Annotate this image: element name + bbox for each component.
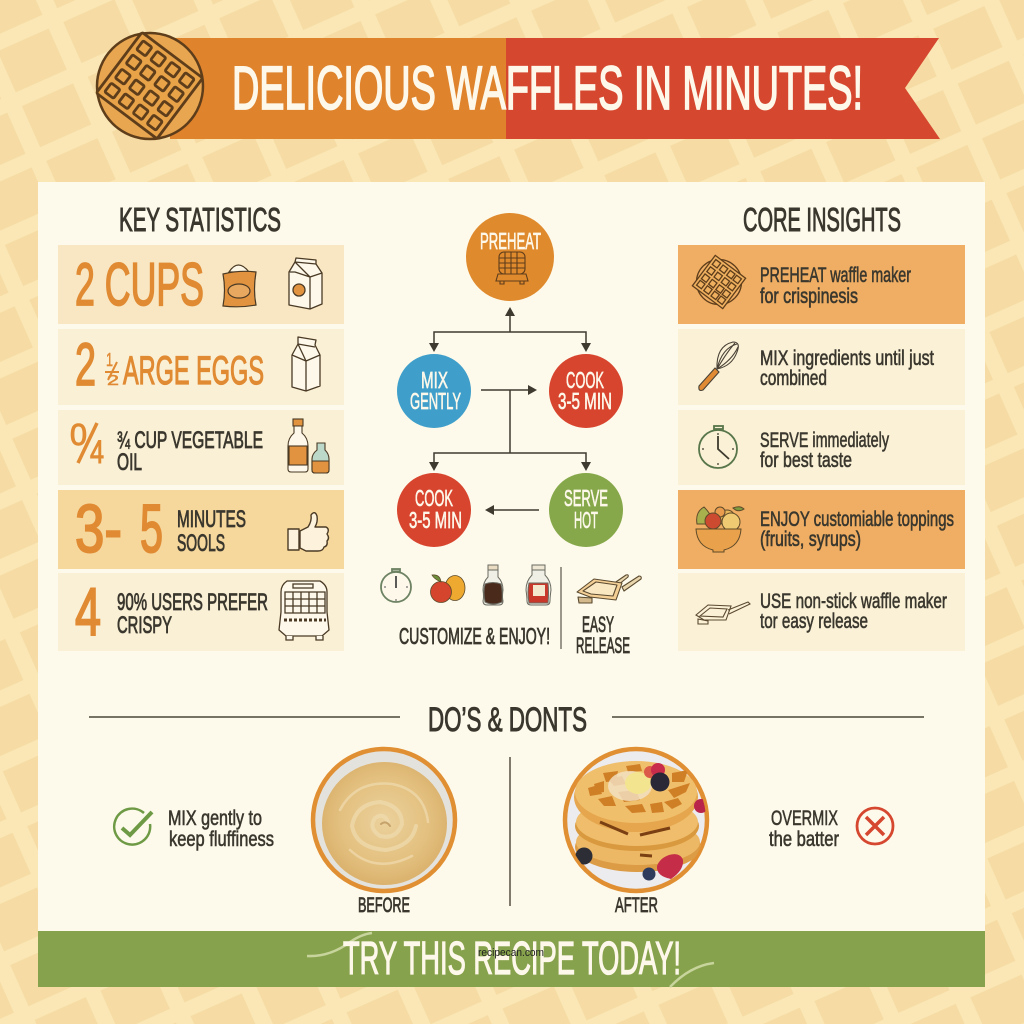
divider [509,757,511,906]
heading: core insights: CORE INSIGHTS [743,201,901,238]
icon: oil bottles [288,419,329,473]
icon: whisk [699,342,738,390]
stat row: 2 cups: 2 CUPS [75,251,204,318]
stat row: users prefer crispy [58,573,344,651]
insight: enjoy: (fruits, syrups) [760,528,861,551]
divider [560,567,562,649]
stat row: large eggs: 1 [106,350,113,370]
panel: flowchart [381,213,641,658]
do: mix gently [114,807,274,851]
icon: waffle logo [96,32,203,139]
banner orange section [170,38,506,139]
do: mix gently: keep fluffiness [169,828,274,851]
heading: key statistics: KEY STATISTICS [119,201,281,238]
stat row: large eggs [58,329,344,405]
stat row: large eggs: 2 [107,372,119,389]
don't: overmix: OVERMIX [771,807,838,830]
step: serve hot: SERVE [564,485,608,511]
step: cook again [397,473,471,547]
don't: overmix: the batter [769,828,839,851]
insight: preheat [678,245,965,324]
icon: waffle iron [496,252,528,284]
call to action: TRY THIS RECIPE TODAY! [343,932,681,984]
label: easy release: RELEASE [576,633,630,658]
stat row: vegetable oil [58,410,344,485]
step: preheat: PREHEAT [480,228,541,254]
panel: do's and don'ts [89,701,924,917]
icon: milk carton [289,258,322,309]
icon: non-stick pan [577,575,641,603]
icon: jam jar [526,565,551,605]
stat row: minutes: MINUTES [177,506,246,533]
label: easy release: EASY [582,612,614,637]
icon: clock [699,426,737,468]
insight: non-stick: tor easy release [760,610,868,633]
icon: flour bag [223,265,256,307]
step: cook: COOK [566,367,604,393]
stat row: 2 cups [58,245,344,324]
icon: thumbs up [288,513,328,551]
banner red section [506,38,940,139]
icon: egg carton [292,337,320,391]
icon: check [114,809,152,845]
stat row: vegetable oil: ¾ CUP VEGETABLE [117,427,263,454]
insight: preheat: for crispinesis [760,285,858,308]
icon: pan [696,602,750,624]
insight: mix [678,329,965,405]
footer banner [38,931,985,987]
insight: non-stick [678,573,965,651]
step: mix gently: GENTLY [410,388,461,414]
label: after: AFTER [615,894,658,917]
step: preheat [466,213,554,301]
don't: overmix [769,807,893,851]
title banner [96,32,940,139]
do: mix gently: MIX gently to [168,807,262,830]
heading: do's and don'ts: DO’S & DONTS [428,701,587,739]
stat row: vegetable oil: 0 [70,417,87,452]
icon: fruit bowl [696,507,744,552]
icon: waffle [692,255,746,309]
stat row: minutes [58,490,344,569]
label: easy release [576,612,630,658]
panel: core insights [678,201,965,651]
panel: key statistics [58,201,344,651]
insight: serve [678,410,965,485]
insight: mix: MIX ingredients until just [760,347,934,370]
stat row: minutes: SOOLS [177,530,225,557]
step: mix gently [397,354,471,428]
main panel [38,182,985,932]
stat row: large eggs: ARGE EGGS [123,349,264,393]
arrows: flow connectors [429,307,591,515]
stat row: users prefer crispy: 4 [75,574,101,650]
icons: customize row [381,565,551,605]
insight: enjoy [678,490,965,569]
insight: serve: SERVE immediately [760,429,889,452]
icon: cross [857,808,893,844]
stat row: users prefer crispy: 90% USERS PREFER [117,589,268,616]
step: cook: 3-5 MIN [558,388,612,414]
stat row: minutes: 5 [140,491,163,567]
step: cook [549,354,623,428]
icon: syrup bottle [483,565,503,605]
watermark: recipecan.com [478,947,544,959]
stat row: users prefer crispy: CRISPY [117,612,172,639]
stat row: minutes: 3- [75,491,122,567]
label: before: BEFORE [358,894,410,917]
step: serve hot [549,473,623,547]
stat row: vegetable oil: 4 [90,434,104,470]
stat row: vegetable oil: OIL [117,449,142,476]
label: customize and enjoy: CUSTOMIZE & ENJOY! [399,623,550,649]
icon: stopwatch [381,569,411,602]
step: cook again: 3-5 MIN [409,507,462,533]
icon: apple and orange [430,575,465,602]
icon: waffle maker [279,581,329,640]
step: mix gently: MIX [421,367,448,393]
photo: batter before [313,749,455,891]
photo: waffles after [565,749,708,891]
step: cook again: COOK [415,485,453,511]
step: serve hot: HOT [574,507,598,533]
insight: mix: combined [760,367,827,390]
insight: serve: for best taste [760,449,852,472]
insight: non-stick: USE non-stick waffle maker [760,590,947,613]
insight: preheat: PREHEAT waffle maker [760,264,911,287]
stat row: large eggs: 2 [75,331,96,398]
